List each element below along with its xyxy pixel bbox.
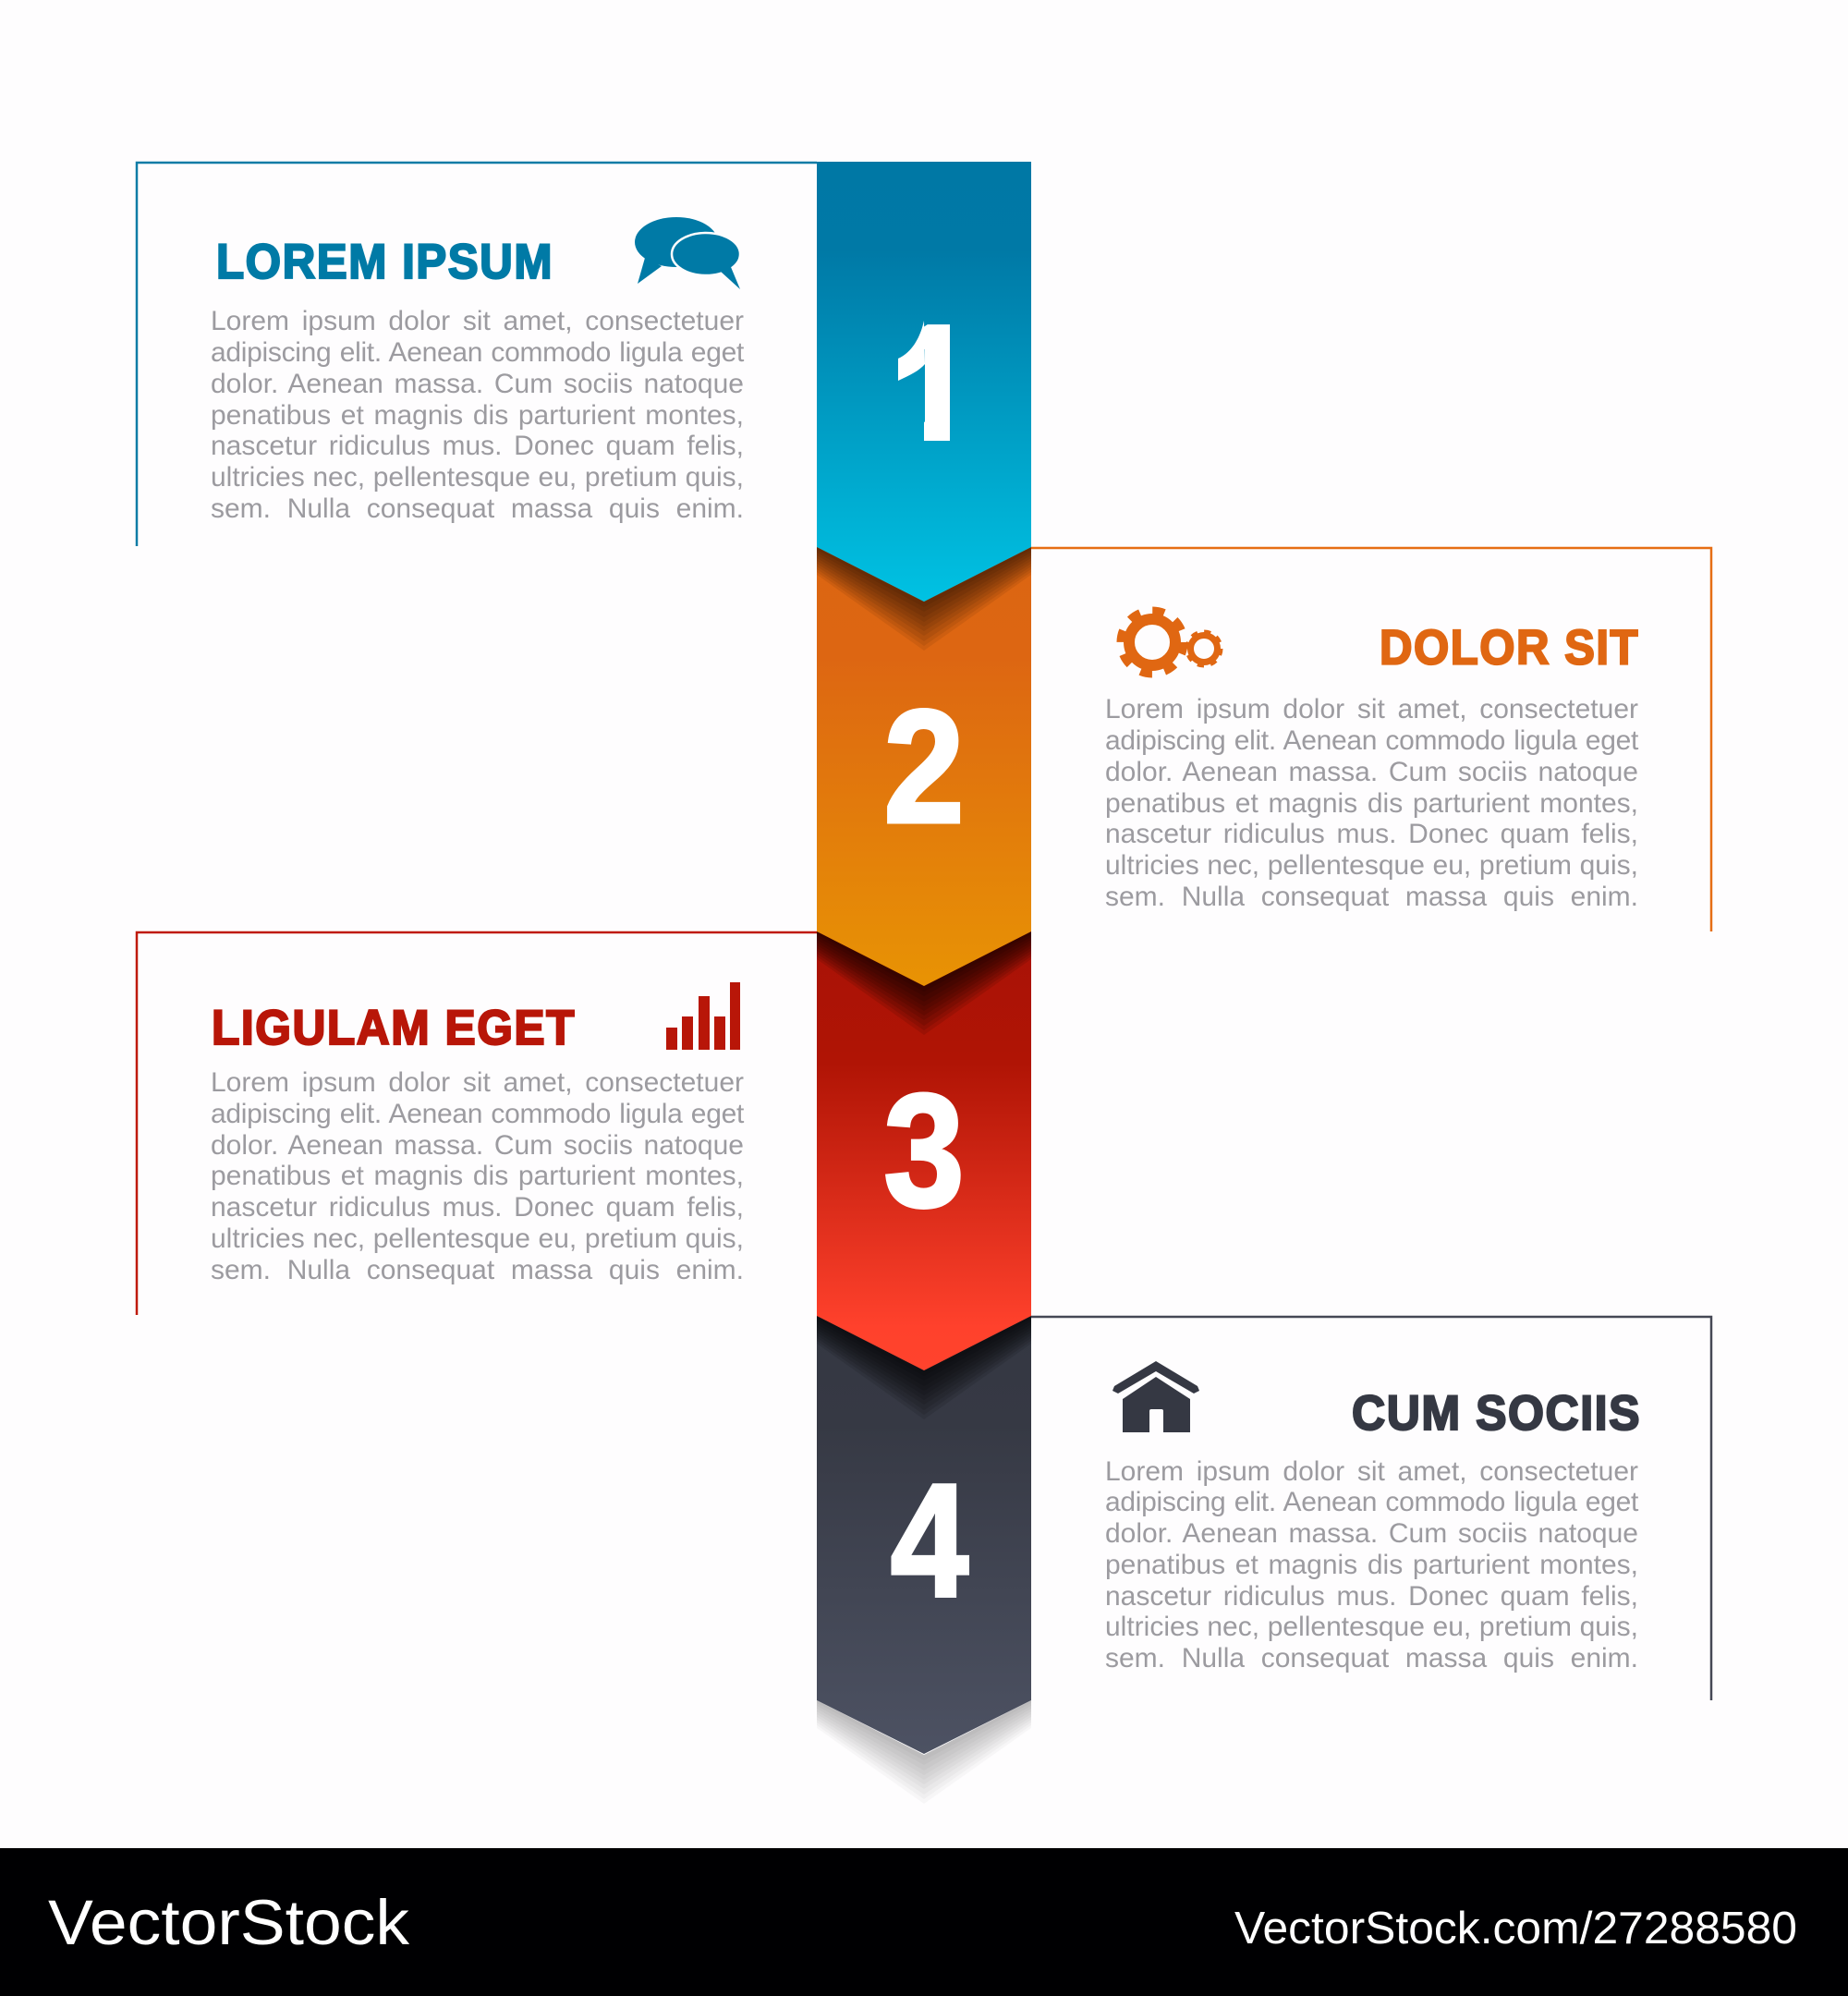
text block: cum sociis body xyxy=(1105,1456,1639,1673)
ribbon segment 4 xyxy=(817,1316,1031,1754)
number 1 xyxy=(898,321,950,441)
text block: ligulam eget body: ultricies nec, pellentesque eu, pretium quis, xyxy=(211,1223,744,1254)
text block: ligulam eget body: nascetur ridiculus mus. Donec quam felis, xyxy=(211,1192,744,1223)
text block: cum sociis body: sem. Nulla consequat massa quis enim. xyxy=(1105,1643,1638,1673)
text block: dolor sit body: ultricies nec, pellentesque eu, pretium quis, xyxy=(1105,850,1638,881)
ribbon: numbered arrow column xyxy=(817,162,1031,1799)
footer logo text: VectorStock xyxy=(48,1887,410,1958)
text block: lorem ipsum body xyxy=(211,306,745,524)
ribbon segment 3 xyxy=(817,931,1031,1370)
panel: dolor sit xyxy=(1031,547,1713,931)
text block: cum sociis body: dolor. Aenean massa. Cum sociis natoque xyxy=(1105,1518,1638,1549)
text block: dolor sit body: Lorem ipsum dolor sit amet, consectetuer xyxy=(1105,694,1638,724)
text block: ligulam eget body xyxy=(211,1067,745,1284)
heading: lorem ipsum: LOREM IPSUM xyxy=(216,235,553,289)
shadow: on ribbon 2 xyxy=(817,547,1031,651)
footer image id: VectorStock.com/27288580 xyxy=(1234,1904,1797,1953)
text block: lorem ipsum body: Lorem ipsum dolor sit amet, consectetuer xyxy=(211,306,744,336)
text block: cum sociis body: penatibus et magnis dis parturient montes, xyxy=(1105,1550,1638,1580)
heading: ligulam eget: LIGULAM EGET xyxy=(212,1001,576,1055)
panel: ligulam eget xyxy=(135,931,817,1315)
text block: ligulam eget body: sem. Nulla consequat massa quis enim. xyxy=(211,1255,744,1284)
heading: cum sociis: CUM SOCIIS xyxy=(1352,1386,1641,1441)
footer: watermark bar xyxy=(0,1848,1848,1996)
text block: ligulam eget body: adipiscing elit. Aenean commodo ligula eget xyxy=(211,1099,744,1129)
shadow: below ribbon 4 xyxy=(817,1700,1031,1804)
text block: lorem ipsum body: adipiscing elit. Aenean commodo ligula eget xyxy=(211,337,744,368)
icon: gears xyxy=(1121,611,1221,674)
ribbon segment 1 xyxy=(817,162,1031,602)
text block: cum sociis body: Lorem ipsum dolor sit amet, consectetuer xyxy=(1105,1456,1638,1486)
panel: lorem ipsum xyxy=(135,161,817,546)
heading: dolor sit: DOLOR SIT xyxy=(1380,621,1639,675)
text block: lorem ipsum body: dolor. Aenean massa. Cum sociis natoque xyxy=(211,369,744,399)
text block: dolor sit body: sem. Nulla consequat massa quis enim. xyxy=(1105,882,1638,912)
number 2: 2 xyxy=(883,677,965,857)
text block: dolor sit body xyxy=(1105,694,1639,912)
shadow: on ribbon 4 xyxy=(817,1316,1031,1419)
text block: lorem ipsum body: ultricies nec, pellentesque eu, pretium quis, xyxy=(211,462,744,493)
number 3: 3 xyxy=(883,1061,965,1241)
text block: dolor sit body: dolor. Aenean massa. Cum sociis natoque xyxy=(1105,757,1638,787)
icon: speech bubbles xyxy=(635,217,740,289)
text block: lorem ipsum body: sem. Nulla consequat massa quis enim. xyxy=(211,493,744,524)
ribbon segment 2 xyxy=(817,547,1031,986)
text block: cum sociis body: nascetur ridiculus mus. Donec quam felis, xyxy=(1105,1580,1638,1612)
text block: cum sociis body: adipiscing elit. Aenean commodo ligula eget xyxy=(1105,1487,1638,1517)
shadow: on ribbon 3 xyxy=(817,931,1031,1035)
text block: lorem ipsum body: penatibus et magnis dis parturient montes, xyxy=(211,400,744,431)
text block: dolor sit body: adipiscing elit. Aenean commodo ligula eget xyxy=(1105,725,1638,756)
number 1: 1 xyxy=(888,291,980,477)
text block: ligulam eget body: penatibus et magnis dis parturient montes, xyxy=(211,1161,744,1191)
text block: cum sociis body: ultricies nec, pellentesque eu, pretium quis, xyxy=(1105,1612,1638,1642)
text block: lorem ipsum body: nascetur ridiculus mus. Donec quam felis, xyxy=(211,431,744,461)
text block: ligulam eget body: Lorem ipsum dolor sit amet, consectetuer xyxy=(211,1067,744,1098)
text block: dolor sit body: nascetur ridiculus mus. Donec quam felis, xyxy=(1105,819,1638,849)
number 4: 4 xyxy=(891,1450,968,1630)
icon: bar chart xyxy=(666,982,740,1050)
text block: ligulam eget body: dolor. Aenean massa. Cum sociis natoque xyxy=(211,1129,744,1161)
icon: house xyxy=(1112,1361,1199,1432)
text block: dolor sit body: penatibus et magnis dis parturient montes, xyxy=(1105,788,1638,819)
panel: cum sociis xyxy=(1031,1316,1713,1700)
